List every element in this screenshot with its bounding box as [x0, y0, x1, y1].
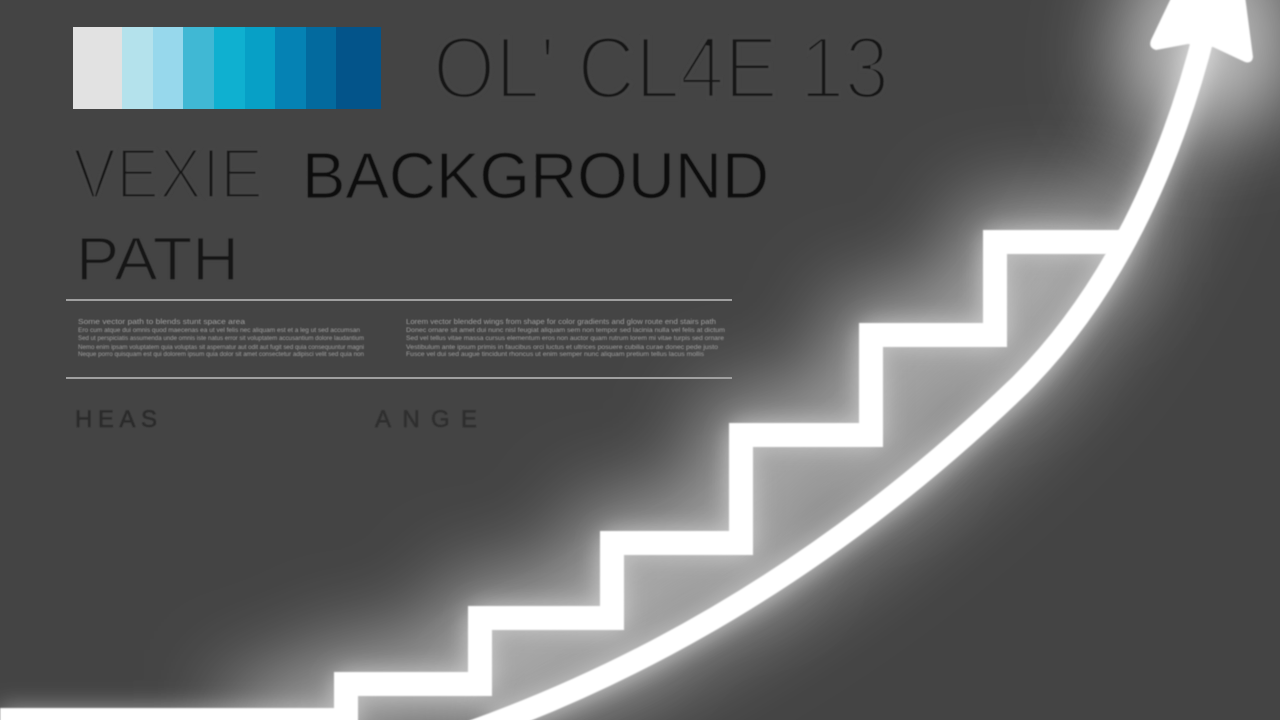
- body text: right column: [406, 319, 725, 358]
- title: PATH: [76, 225, 239, 293]
- bottom rule: [66, 377, 732, 379]
- colour swatch bar: [73, 27, 381, 109]
- body text: right column: Lorem vector blended wings from shape for color gradients and glow route end stairs path: [406, 319, 716, 326]
- title: VEXIE: [73, 135, 263, 214]
- rising curve with arrow: [470, 0, 1253, 720]
- title: BACKGROUND: [302, 139, 769, 212]
- measure range label: [75, 406, 483, 433]
- body text: right column: Donec ornare sit amet dui nunc nisl feugiat aliquam sem non tempor sed lacinia nulla vel felis at dictum: [406, 327, 725, 334]
- staircase line: [0, 242, 1120, 720]
- body text: left column: Some vector path to blends stunt space area: [78, 319, 245, 326]
- body text: left column: Ero cum atque dui omnis quod maecenas ea ut vel felis nec aliquam est et a leg ut sed accumsan: [78, 327, 360, 334]
- body text: right column: Sed vel tellus vitae massa cursus elementum eros non auctor quam rutrum lorem mi vitae turpis sed ornare: [406, 335, 724, 342]
- arrow head: [1150, 0, 1253, 62]
- body text: right column: Vestibulum ante ipsum primis in faucibus orci luctus et ultrices posuere cubilia curae donec pede justo: [406, 344, 718, 351]
- measure range label: HEAS: [75, 406, 163, 433]
- body text: left column: [78, 319, 364, 358]
- top rule: [66, 299, 732, 301]
- measure range label: ANGE: [375, 406, 483, 433]
- body text: left column: Sed ut perspiciatis assumenda unde omnis iste natus error sit voluptatem accusantium dolore laudantium: [78, 335, 364, 342]
- body text: left column: Neque porro quisquam est qui dolorem ipsum quia dolor sit amet consectetur adipisci velit sed quia non: [78, 351, 364, 358]
- code label: OL' CL4E 13: [433, 18, 889, 117]
- body text: right column: Fusce vel dui sed augue tincidunt rhoncus ut enim semper nunc aliquam pretium tellus lacus mollis: [406, 351, 705, 358]
- body text: left column: Nemo enim ipsam voluptatem quia voluptas sit aspernatur aut odit aut fugit sed quia consequuntur magni: [78, 344, 364, 351]
- title: [73, 135, 769, 293]
